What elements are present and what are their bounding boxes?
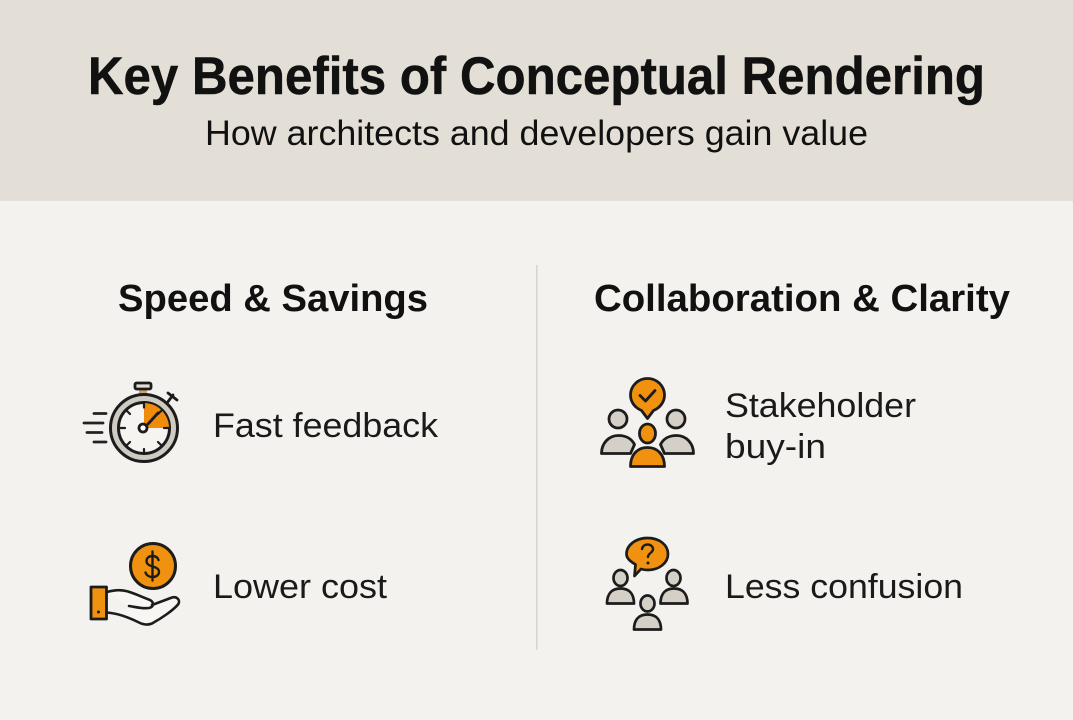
item: stakeholder buy-in	[602, 378, 916, 466]
item: fast feedback	[84, 383, 439, 462]
item: less confusion	[607, 538, 963, 630]
heading: speed and savings: Speed & Savings	[118, 278, 428, 320]
item: lower cost	[91, 544, 388, 625]
heading: collaboration and clarity: Collaboration & Clarity	[594, 278, 1010, 320]
panel: collaboration and clarity	[594, 278, 1010, 630]
label: stakeholder buy-in: Stakeholder	[725, 387, 916, 425]
label: less confusion: Less confusion	[725, 568, 963, 606]
icon: hand with coin	[91, 544, 179, 625]
panel: speed and savings	[84, 278, 439, 625]
label: stakeholder buy-in	[725, 387, 916, 466]
label: lower cost: Lower cost	[213, 568, 388, 606]
header band	[0, 0, 1073, 201]
label: stakeholder buy-in: buy-in	[725, 428, 826, 466]
icon: stopwatch	[84, 383, 178, 462]
icon: group with approval bubble	[602, 378, 694, 466]
icon: group with question bubble	[607, 538, 688, 630]
subtitle: How architects and developers gain value	[205, 114, 868, 153]
label: fast feedback: Fast feedback	[213, 407, 439, 445]
title: Key Benefits of Conceptual Rendering	[88, 47, 985, 106]
